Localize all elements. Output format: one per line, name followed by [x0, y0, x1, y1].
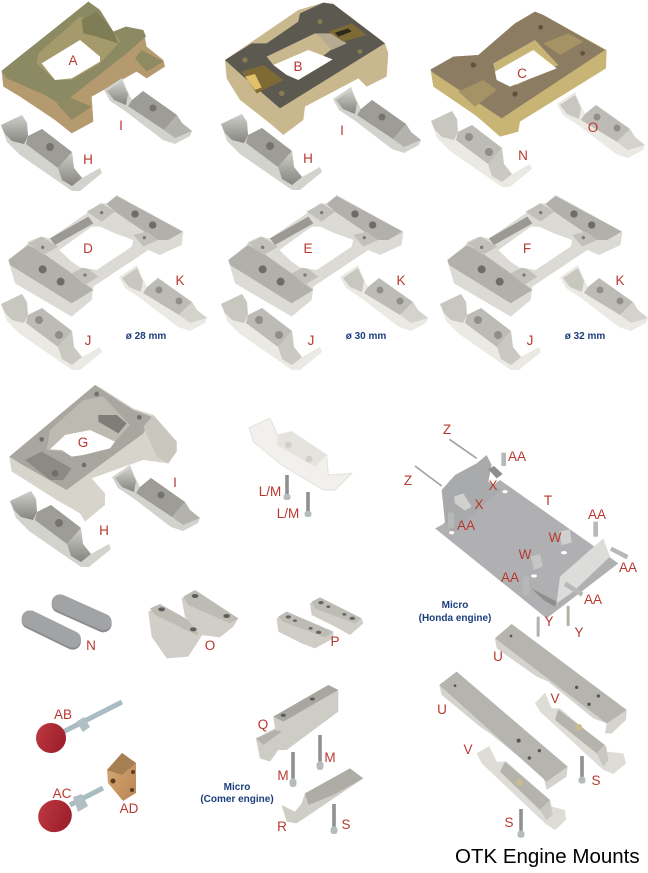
- part: clamp K: [340, 265, 428, 331]
- part: N plates: [30, 603, 103, 653]
- part: bolt L/M: [284, 475, 290, 500]
- part: frame E: [228, 195, 403, 317]
- panel: mount F, 32 mm: [440, 195, 648, 370]
- part: frame D: [8, 195, 183, 317]
- label: M: M: [277, 768, 289, 783]
- label: I: I: [340, 123, 344, 138]
- label: D: D: [83, 241, 93, 256]
- label: AA: AA: [584, 592, 602, 607]
- part: bolts Y: [537, 606, 570, 637]
- label: K: K: [396, 273, 406, 288]
- part: O blocks: [148, 590, 238, 658]
- panel: knobs AB, AC and block AD: [31, 702, 139, 838]
- label: Z: Z: [443, 422, 451, 437]
- part: frame F: [447, 195, 622, 317]
- label: T: T: [544, 493, 552, 508]
- panel: white clamp L/M with bolts: [249, 418, 352, 521]
- panel: mount G with clamps I and H: [9, 385, 200, 567]
- part: clamp I: [333, 87, 421, 153]
- label: H: H: [83, 152, 93, 167]
- part: clamp J: [440, 294, 541, 370]
- label: J: J: [85, 333, 91, 348]
- label: AA: AA: [501, 570, 519, 585]
- part: clamp K: [119, 265, 207, 331]
- label: P: P: [330, 634, 340, 649]
- label: U: U: [437, 702, 447, 717]
- label: V: V: [463, 742, 473, 757]
- label: K: K: [175, 273, 185, 288]
- label: H: H: [99, 523, 109, 538]
- caption: Micro Honda engine: [419, 600, 491, 624]
- part: small bolts AA: [448, 453, 628, 597]
- part: frame G: [9, 385, 177, 522]
- label: Y: Y: [574, 625, 584, 640]
- label: S: S: [591, 773, 601, 788]
- label: O: O: [588, 120, 598, 135]
- part: frame B: [225, 3, 388, 135]
- caption: Micro Comer engine: [200, 782, 274, 805]
- caption: Micro Honda engine: (Honda engine): [419, 613, 491, 624]
- part: clamp N: [431, 111, 532, 187]
- label: W: W: [549, 530, 562, 545]
- part: knob AB: [31, 702, 122, 758]
- label: I: I: [119, 118, 123, 133]
- title: OTK Engine Mounts: [455, 845, 640, 868]
- label: AA: AA: [619, 560, 637, 575]
- part: clamp I: [112, 465, 200, 531]
- part: bolt S: [330, 804, 338, 834]
- label: F: F: [523, 241, 531, 256]
- label: X: X: [488, 478, 498, 493]
- part: bolt L/M: [304, 492, 312, 517]
- label: AB: AB: [54, 707, 72, 722]
- label: X: X: [474, 497, 484, 512]
- part: clamp J: [1, 294, 102, 370]
- label: S: S: [504, 815, 514, 830]
- part: frame C: [431, 12, 607, 137]
- caption: Micro Comer engine: Micro: [224, 782, 250, 793]
- label: AA: AA: [588, 507, 606, 522]
- part: bolts M: [290, 752, 296, 787]
- label: AA: AA: [508, 449, 526, 464]
- part: clamp J: [221, 294, 322, 370]
- diameter note 28 mm: ø 28 mm: [126, 331, 166, 342]
- label: L/M: L/M: [259, 484, 281, 499]
- label: W: W: [519, 547, 532, 562]
- diameter note 30 mm: ø 30 mm: [346, 331, 386, 342]
- label: AC: AC: [53, 786, 72, 801]
- label: H: H: [303, 151, 313, 166]
- label: U: U: [493, 649, 503, 664]
- panel: mount E, 30 mm: [221, 195, 428, 370]
- label: N: N: [86, 638, 96, 653]
- label: M: M: [324, 750, 336, 765]
- part: white clamp: [249, 418, 352, 490]
- part: bolt S: [518, 809, 524, 838]
- part: clamp O: [557, 92, 645, 158]
- part: clamp V: [477, 746, 566, 830]
- panel: Micro Honda engine plate T: [404, 422, 637, 640]
- part: clamp K: [560, 265, 648, 331]
- label: S: S: [341, 817, 351, 832]
- label: A: A: [68, 53, 78, 68]
- part: clamp H: [221, 114, 322, 190]
- part: bar U: [439, 672, 568, 790]
- caption: Micro Honda engine: Micro: [442, 600, 468, 611]
- caption: Micro Comer engine: (Comer engine): [200, 794, 274, 805]
- part: frame A: [2, 2, 165, 133]
- label: R: R: [277, 819, 287, 834]
- part: base plate T: [415, 439, 628, 637]
- label: V: V: [550, 691, 560, 706]
- label: AD: AD: [120, 801, 139, 816]
- label: J: J: [308, 333, 314, 348]
- label: G: G: [78, 435, 88, 450]
- label: AA: AA: [457, 518, 475, 533]
- part: clamp I: [104, 78, 192, 144]
- panel: mount B with clamps I and H: [221, 3, 421, 190]
- label: Q: Q: [258, 717, 268, 732]
- part: bolt S: [578, 756, 586, 784]
- label: L/M: L/M: [277, 506, 299, 521]
- label: K: K: [615, 273, 625, 288]
- panel: Micro Comer engine parts: [256, 685, 363, 834]
- part: block AD: [107, 753, 136, 801]
- label: E: E: [303, 241, 313, 256]
- diameter note 32 mm: ø 32 mm: [565, 331, 605, 342]
- label: B: B: [293, 59, 303, 74]
- label: O: O: [205, 638, 215, 653]
- label: N: N: [518, 148, 528, 163]
- label: Z: Z: [404, 473, 412, 488]
- part: clamp R: [282, 768, 363, 823]
- part: clamp H: [1, 115, 102, 191]
- label: Y: Y: [544, 614, 554, 629]
- panel: mount A with clamps I and H: [1, 2, 192, 191]
- part: bar U: [495, 624, 627, 733]
- part: bar Q: [256, 685, 338, 762]
- part: long bolts Z: [415, 439, 477, 486]
- label: C: C: [517, 66, 527, 81]
- panel: Micro Honda bars U and clamps V: [437, 624, 627, 838]
- label: J: J: [527, 333, 533, 348]
- panel: mount D, 28 mm: [1, 195, 207, 370]
- part: clamp V: [535, 693, 626, 774]
- part: knob AC: [33, 788, 103, 838]
- label: I: I: [173, 475, 177, 490]
- part: clamp H: [10, 491, 111, 567]
- panel: mount C with clamps O and N: [431, 12, 645, 187]
- part: P plates: [277, 597, 363, 649]
